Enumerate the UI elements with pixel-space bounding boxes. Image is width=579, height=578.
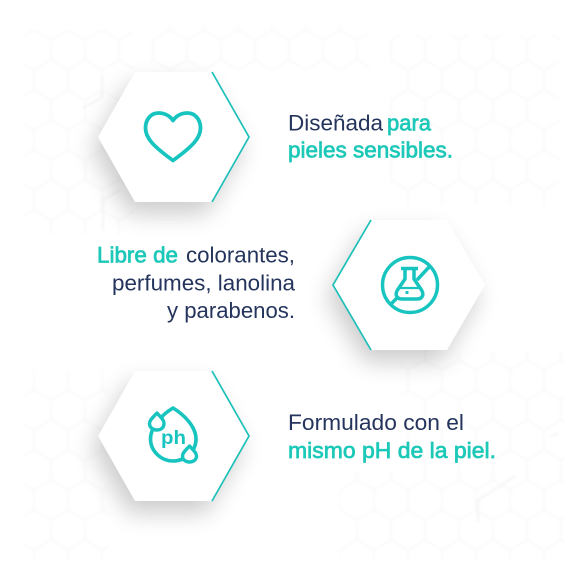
text: same pH as skin — [288, 410, 496, 463]
text: free from: colorantes, — [186, 242, 295, 268]
text: sensitive skin: para — [387, 110, 431, 136]
text: sensitive skin: Diseñada — [288, 110, 383, 136]
text: free from: Libre de — [97, 242, 178, 268]
text: free from — [97, 242, 295, 323]
icon: heart — [146, 113, 200, 160]
panel: heart hexagon — [92, 72, 249, 214]
text: sensitive skin — [288, 110, 453, 162]
panel: pH hexagon — [92, 371, 249, 513]
text: free from: y parabenos. — [167, 298, 295, 323]
panel: flask hexagon — [327, 220, 485, 362]
text: same pH as skin: Formulado con el — [288, 410, 464, 435]
text: same pH as skin: mismo pH de la piel. — [288, 438, 496, 463]
text: free from: perfumes, lanolina — [112, 270, 295, 296]
icon: crossed-out flask — [382, 258, 438, 312]
icon: pH droplets — [150, 408, 196, 462]
icon: pH droplets: ph — [161, 428, 186, 449]
text: sensitive skin: pieles sensibles. — [288, 138, 453, 162]
